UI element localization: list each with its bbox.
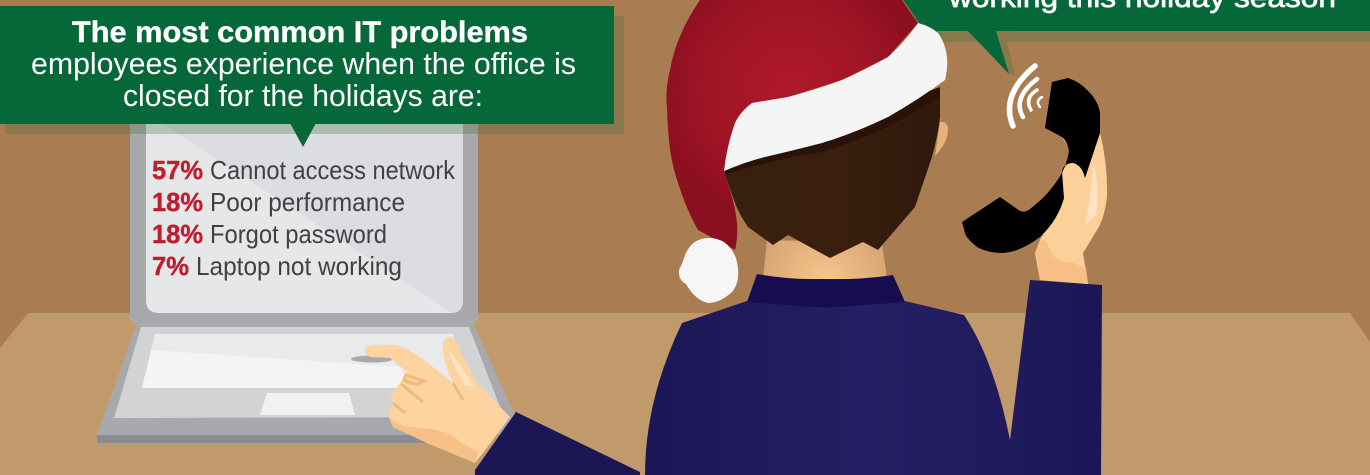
- laptop base: [97, 323, 514, 435]
- hair: [724, 87, 940, 258]
- item: 57%: Cannot access network: [210, 155, 456, 185]
- item: 7%: 7%: [152, 251, 189, 281]
- ear: [935, 122, 948, 156]
- laptop screen: [130, 110, 478, 325]
- hand pointing at laptop: [365, 337, 640, 475]
- callout: IT problems: [0, 6, 614, 147]
- item: 18% password: Forgot password: [210, 219, 387, 249]
- keyboard: [142, 334, 468, 388]
- hand holding phone: [1035, 133, 1107, 284]
- shadow: left callout: [5, 16, 624, 134]
- callout: working this holiday season: [903, 0, 1370, 74]
- icon: telephone handset: [962, 78, 1100, 253]
- heading: The most common IT problems: [72, 16, 528, 49]
- subheading line 1: employees experience when the office is: [31, 46, 576, 81]
- item: 18% password: 18%: [152, 219, 203, 249]
- pompom: [679, 238, 738, 303]
- shadow: right callout: [915, 0, 1370, 75]
- collar: [747, 274, 905, 308]
- desk: [0, 313, 1370, 475]
- trackpad: [260, 393, 355, 415]
- icon: sound waves: [1009, 66, 1042, 126]
- hat band: [724, 23, 947, 171]
- item: 7%: Laptop not working: [196, 251, 402, 281]
- sweater body: [645, 280, 1102, 475]
- neck: [763, 240, 887, 279]
- hat: [666, 0, 918, 250]
- problem list: [152, 155, 456, 281]
- item: 57%: 57%: [152, 155, 203, 185]
- laptop: [97, 110, 514, 443]
- person: [645, 0, 1102, 475]
- subheading line 2: closed for the holidays are:: [123, 78, 483, 113]
- sleeve: [475, 412, 640, 475]
- item: 18% poor: 18%: [152, 187, 203, 217]
- item: 18% poor: Poor performance: [210, 187, 405, 217]
- finger shadow: [351, 356, 393, 362]
